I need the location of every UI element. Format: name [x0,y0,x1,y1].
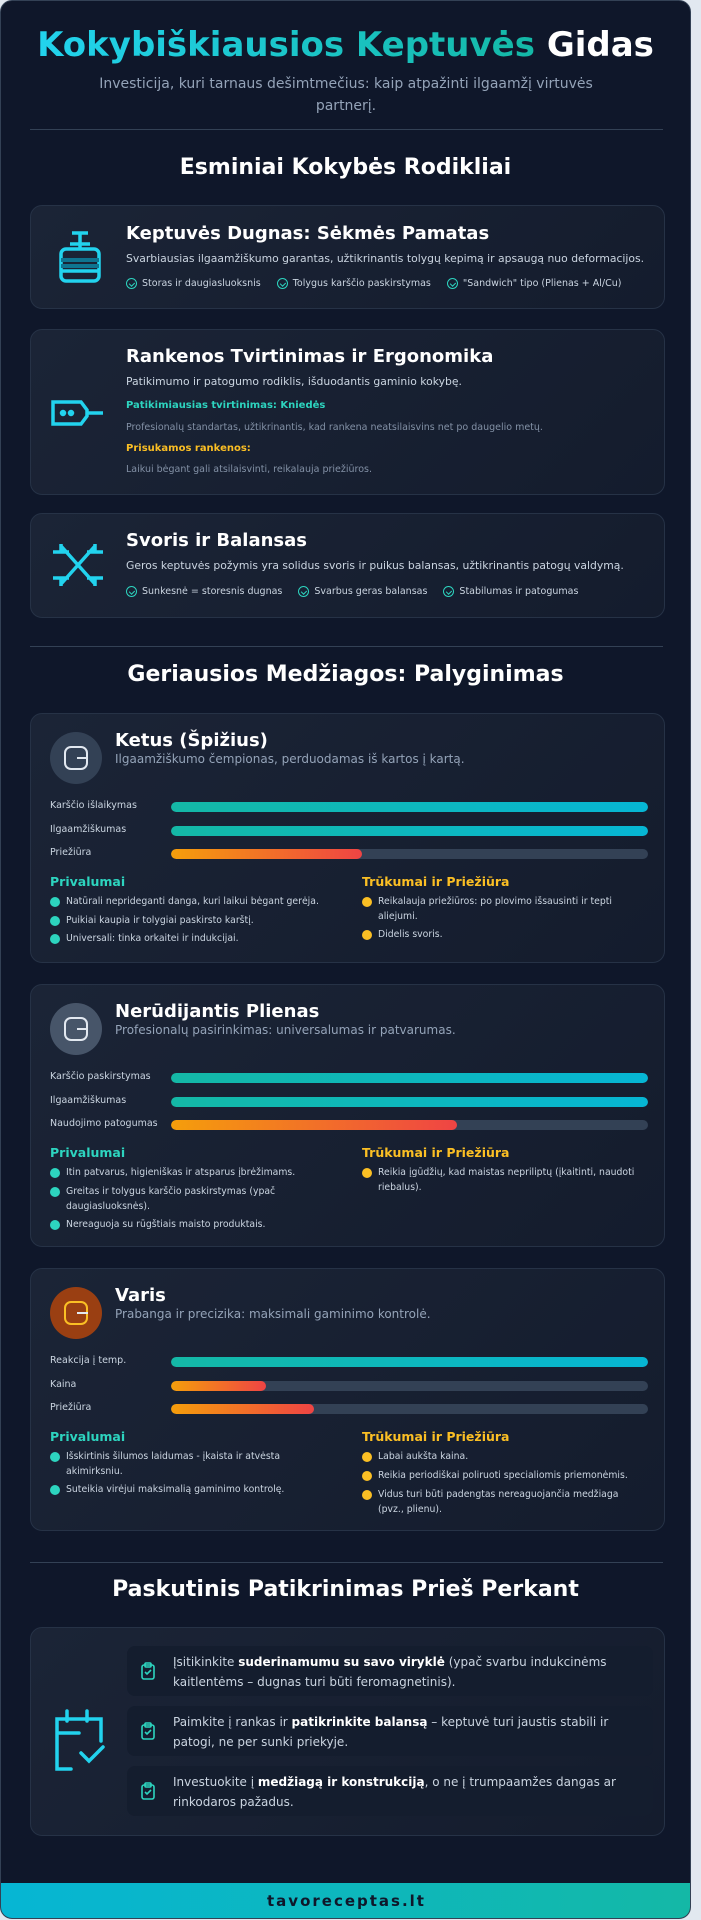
bar chart: Ilgaamžiškumas [50,1095,126,1106]
bar chart: Kaina [50,1379,76,1390]
footer [1,1883,692,1920]
checks: Tolygus karščio paskirstymas [293,278,431,289]
checklist item 1 [127,1646,653,1696]
heading: materials: Geriausios Medžiagos: Palyginimas [127,662,564,687]
cons [362,1145,634,1193]
pros: Itin patvarus, higieniškas ir atsparus įbrėžimams. [66,1167,295,1178]
heading: final check: Paskutinis Patikrinimas Prieš Perkant [112,1577,579,1602]
text: desc: Svarbiausias ilgaamžiškumo garantas, užtikrinantis tolygų kepimą ir apsaugą nuo deformacijos. [126,252,644,265]
bar chart [50,1071,648,1130]
checklist item 3: Investuokite į medžiagą ir konstrukciją, o ne į trumpaamžes dangas ar rinkodaros pažadus. [173,1775,616,1809]
text: name: Ketus (Špižius) [115,730,268,751]
panel: stainless steel: Profesionalų pasirinkimas: universalumas ir patvarumas. [115,1023,456,1037]
cons: Trūkumai ir Priežiūra [362,874,509,889]
cons: Didelis svoris. [378,929,443,940]
cons: Trūkumai ir Priežiūra [362,1429,509,1444]
checklist item 3 [127,1766,653,1816]
pros: Puikiai kaupia ir tolygiai paskirsto karštį. [66,915,254,926]
bar chart [50,1355,648,1414]
checklist item 1: Įsitikinkite suderinamumu su savo viryklė (ypač svarbu indukcinėms kaitlentėms – dugnas turi būti feromagnetinis). [173,1655,607,1689]
panel: weight and balance [30,513,665,618]
icon: pan bottom [59,231,101,283]
panel: stainless steel [30,984,665,1247]
checks [126,586,578,597]
checklist item 2: Paimkite į rankas ir patikrinkite balansą – keptuvė turi jaustis stabili ir patogi, ne per sunki priekyje. [173,1715,608,1749]
checklist item 2 [127,1706,653,1756]
text: name: Varis [115,1285,166,1306]
pros: Privalumai [50,1145,125,1160]
panel: pan bottom [30,205,665,309]
checks [126,278,621,289]
bar chart: Karščio išlaikymas [50,800,137,811]
pros: Išskirtinis šilumos laidumas - įkaista ir atvėsta akimirksniu. [66,1451,280,1477]
panel: handle [30,329,665,495]
pros [50,874,319,944]
cons [362,1429,628,1515]
bar chart: Reakcija į temp. [50,1355,126,1366]
icon: calendar check [55,1709,105,1771]
checks: Sunkesnė = storesnis dugnas [142,586,282,597]
icon: handle [51,400,103,426]
cons: Vidus turi būti padengtas nereaguojančia medžiaga (pvz., plienu). [378,1489,618,1515]
text: desc: Patikimumo ir patogumo rodiklis, išduodantis gaminio kokybę. [126,375,462,388]
pros: Nereaguoja su rūgštiais maisto produktais. [66,1219,265,1230]
cons: Reikia periodiškai poliruoti specialiomis priemonėmis. [378,1470,628,1481]
cons: Reikalauja priežiūros: po plovimo išsausinti ir tepti aliejumi. [378,896,612,922]
text: rivets: Patikimiausias tvirtinimas: Kniedės [126,400,325,411]
bar chart: Karščio paskirstymas [50,1071,151,1082]
pros: Privalumai [50,1429,125,1444]
bar chart: Ilgaamžiškumas [50,824,126,835]
panel: handle: Profesionalų standartas, užtikrinantis, kad rankena neatsilaisvins net po daugelio metų. [126,422,543,433]
footer: tavoreceptas.lt [267,1892,426,1910]
panel: final checklist [30,1627,665,1836]
heading: quality indicators: Esminiai Kokybės Rodikliai [180,155,511,180]
panel: cast iron [30,713,665,963]
bar chart: Priežiūra [50,847,91,858]
cons: Reikia įgūdžių, kad maistas nepriliptų (įkaitinti, naudoti riebalus). [378,1167,634,1193]
icon: cast iron [50,732,102,784]
title: Kokybiškiausios Keptuvės Gidas [37,25,654,65]
panel: copper: Prabanga ir precizika: maksimali gaminimo kontrolė. [115,1307,431,1321]
pros: Privalumai [50,874,125,889]
cons: Labai aukšta kaina. [378,1451,468,1462]
checks: "Sandwich" tipo (Plienas + Al/Cu) [463,278,621,289]
pros: Greitas ir tolygus karščio paskirstymas (ypač daugiasluoksnės). [66,1186,275,1212]
text: title: Rankenos Tvirtinimas ir Ergonomika [126,346,493,367]
bar chart: Priežiūra [50,1402,91,1413]
pros [50,1145,295,1230]
bar chart [50,800,648,859]
icon: stainless [50,1003,102,1055]
pros [50,1429,284,1495]
cons [362,874,612,940]
panel: cast iron: Ilgaamžiškumo čempionas, perduodamas iš kartos į kartą. [115,752,465,766]
text: name: Nerūdijantis Plienas [115,1001,319,1022]
text: title: Svoris ir Balansas [126,530,307,551]
checks: Stabilumas ir patogumas [459,586,578,597]
pros: Natūrali neprideganti danga, kuri laikui bėgant gerėja. [66,896,319,907]
subtitle: Investicija, kuri tarnaus dešimtmečius: kaip atpažinti ilgaamžį virtuvės partnerį. [99,76,593,114]
pros: Universali: tinka orkaitei ir indukcijai. [66,933,239,944]
panel: copper [30,1268,665,1531]
icon: copper [50,1287,102,1339]
checks: Svarbus geras balansas [314,586,427,597]
panel: handle: Laikui bėgant gali atsilaisvinti, reikalauja priežiūros. [126,464,372,475]
text: screwed: Prisukamos rankenos: [126,443,251,454]
checks: Storas ir daugiasluoksnis [142,278,261,289]
icon: balance [53,544,103,586]
text: desc: Geros keptuvės požymis yra solidus svoris ir puikus balansas, užtikrinantis patogų valdymą. [126,559,624,572]
panel: copper: Suteikia virėjui maksimalią gaminimo kontrolę. [66,1484,284,1495]
bar chart: Naudojimo patogumas [50,1118,158,1129]
text: title: Keptuvės Dugnas: Sėkmės Pamatas [126,223,489,244]
cons: Trūkumai ir Priežiūra [362,1145,509,1160]
